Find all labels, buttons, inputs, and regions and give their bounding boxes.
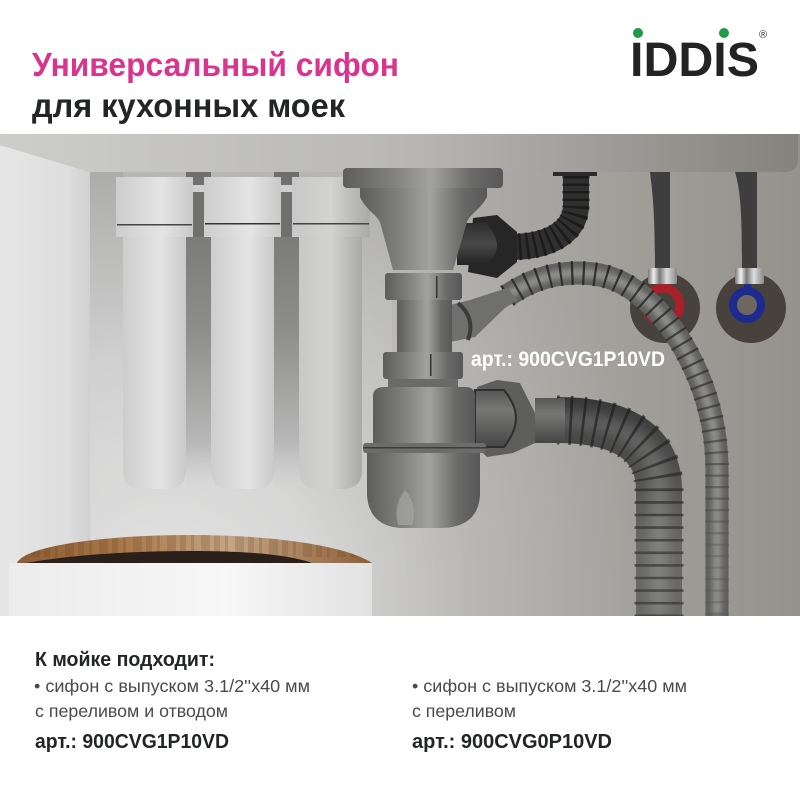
blue handle <box>733 291 761 319</box>
drain outlet pipe <box>475 390 516 447</box>
bowl ring <box>363 443 486 453</box>
wall taps <box>630 172 786 343</box>
title: для кухонных моек <box>32 87 345 124</box>
bowl upper <box>373 387 475 443</box>
text block: right column <box>412 676 687 753</box>
logo: IDDIS: ® <box>759 29 767 41</box>
shadows between filters <box>186 172 211 492</box>
middle pipe <box>397 300 452 352</box>
black pipe <box>457 223 497 265</box>
article label on photo: арт.: 900CVG1P10VD <box>471 348 665 371</box>
text block: left column <box>34 649 310 753</box>
lower nut <box>383 352 463 379</box>
black union nut <box>468 215 517 278</box>
disc right <box>716 273 786 343</box>
text block: left column: • сифон с выпуском 3.1/2''x40 мм <box>34 676 310 696</box>
text block: left column: К мойке подходит: <box>35 649 215 671</box>
thin corrugated hose <box>507 273 717 616</box>
title <box>32 46 399 124</box>
water filters <box>116 172 370 492</box>
filter 1 <box>116 177 193 489</box>
photo: sink cabinet with siphon <box>0 134 800 616</box>
text block: right column: арт.: 900CVG0P10VD <box>412 731 612 753</box>
filter 2 <box>204 177 281 489</box>
drain outlet nut <box>477 380 537 457</box>
left cabinet wall <box>0 145 90 616</box>
upper nut <box>385 273 462 300</box>
bowl lower <box>367 453 480 528</box>
back wall <box>0 134 800 616</box>
sink underside <box>0 134 798 172</box>
filter connectors <box>193 217 204 237</box>
title: Универсальный сифон <box>32 46 399 83</box>
text block: right column: • сифон с выпуском 3.1/2''x40 мм <box>412 676 687 696</box>
black hoses <box>650 172 670 270</box>
text block: right column: с переливом <box>412 701 516 721</box>
siphon <box>343 168 565 528</box>
wooden lid bin <box>9 535 380 616</box>
disc left <box>630 273 700 343</box>
funnel <box>360 188 487 270</box>
logo: IDDIS: IDDIS <box>630 34 759 87</box>
black corrugated overflow hose <box>457 172 597 278</box>
side branch for thin hose <box>450 288 518 342</box>
red handle <box>646 288 680 322</box>
flange <box>343 168 503 188</box>
chrome nuts <box>648 268 677 284</box>
large corrugated drain hose <box>557 420 659 616</box>
text block: left column: арт.: 900CVG1P10VD <box>35 731 229 753</box>
text block: left column: с переливом и отводом <box>35 701 228 721</box>
filter 3 <box>292 177 370 489</box>
